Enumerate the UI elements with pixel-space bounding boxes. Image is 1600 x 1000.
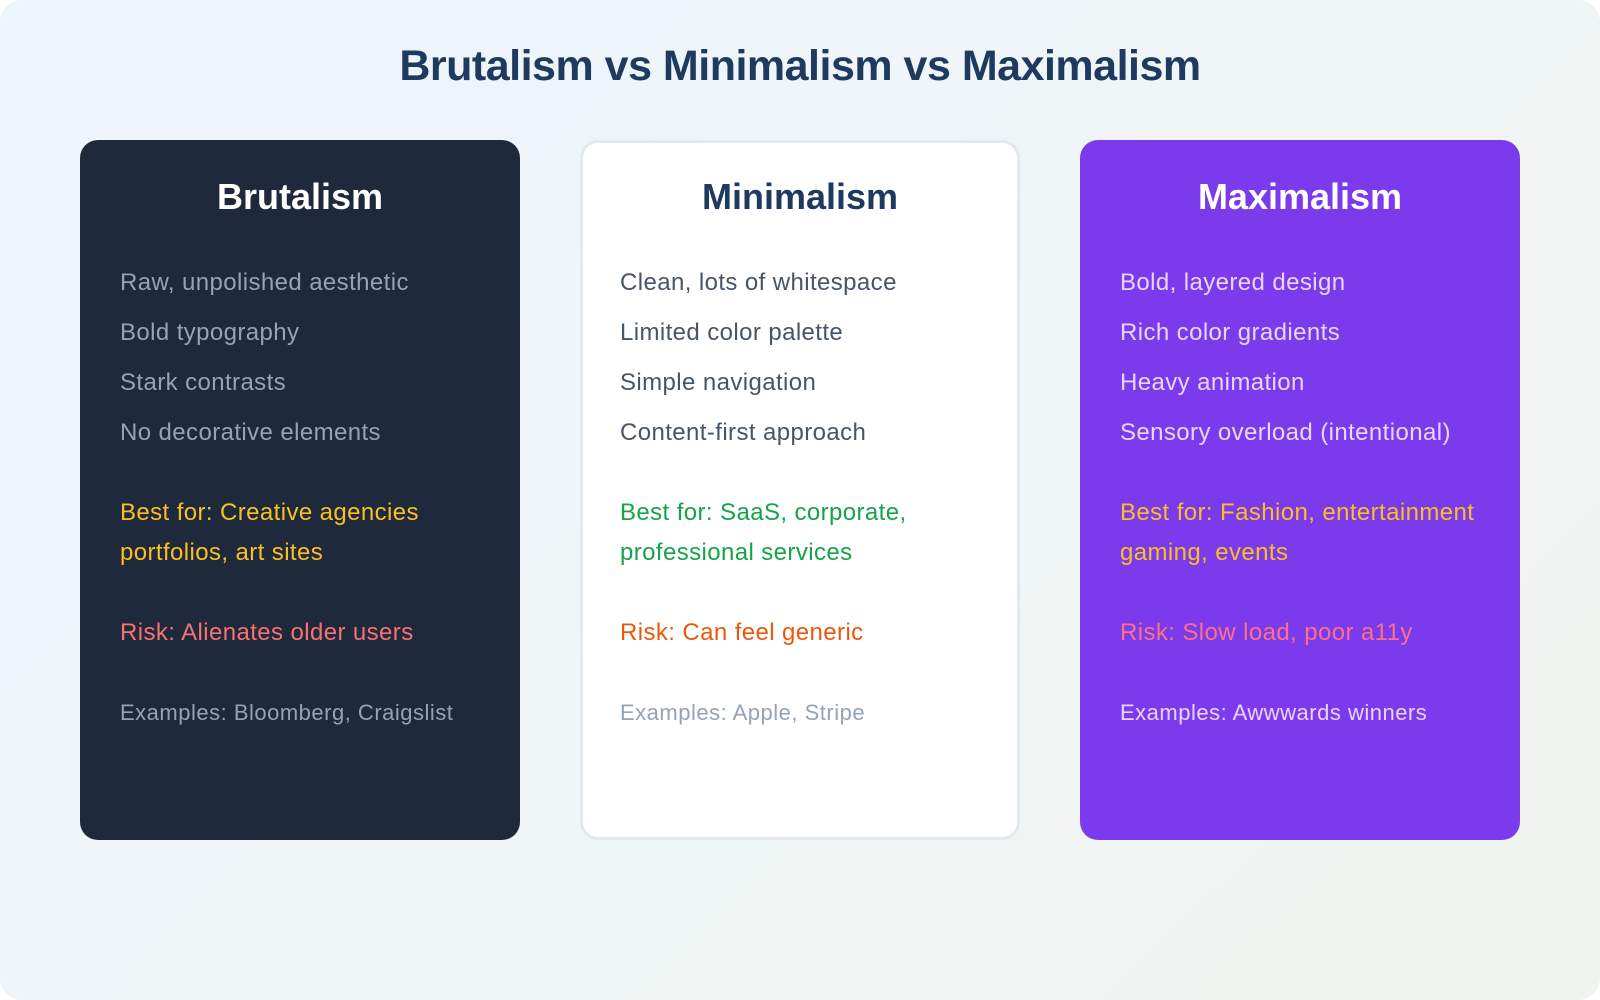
list: minimalism traits: Simple navigation xyxy=(620,369,816,396)
best for: brutalism: Best for: Creative agencies xyxy=(120,499,419,526)
heading: maximalism: Maximalism xyxy=(1198,176,1402,217)
list: maximalism traits: Rich color gradients xyxy=(1120,319,1340,346)
panel: maximalism xyxy=(1080,140,1520,840)
list: maximalism traits: Sensory overload (intentional) xyxy=(1120,419,1451,446)
heading: minimalism: Minimalism xyxy=(702,176,898,217)
best for: minimalism: Best for: SaaS, corporate, xyxy=(620,499,907,526)
risk: minimalism: Risk: Can feel generic xyxy=(620,619,864,646)
list: brutalism traits: No decorative elements xyxy=(120,419,381,446)
list: minimalism traits: Clean, lots of whitespace xyxy=(620,269,897,296)
list: maximalism traits: Heavy animation xyxy=(1120,369,1305,396)
heading: brutalism: Brutalism xyxy=(217,176,383,217)
risk: brutalism: Risk: Alienates older users xyxy=(120,619,414,646)
list: maximalism traits: Bold, layered design xyxy=(1120,269,1345,296)
list: minimalism traits: Limited color palette xyxy=(620,319,843,346)
best for: brutalism: portfolios, art sites xyxy=(120,539,323,566)
list: brutalism traits: Raw, unpolished aesthetic xyxy=(120,269,409,296)
best for: brutalism xyxy=(120,499,419,566)
panel: minimalism xyxy=(580,140,1020,840)
list: minimalism traits: Content-first approach xyxy=(620,419,866,446)
best for: minimalism xyxy=(620,499,907,566)
best for: maximalism: gaming, events xyxy=(1120,539,1288,566)
examples: brutalism: Examples: Bloomberg, Craigslist xyxy=(120,700,453,725)
list: brutalism traits: Stark contrasts xyxy=(120,369,286,396)
panel: brutalism xyxy=(80,140,520,840)
title: Brutalism vs Minimalism vs Maximalism xyxy=(399,42,1201,90)
list: brutalism traits xyxy=(120,269,409,446)
list: brutalism traits: Bold typography xyxy=(120,319,299,346)
examples: minimalism: Examples: Apple, Stripe xyxy=(620,700,865,725)
best for: maximalism xyxy=(1120,499,1474,566)
best for: minimalism: professional services xyxy=(620,539,852,566)
list: maximalism traits xyxy=(1120,269,1451,446)
risk: maximalism: Risk: Slow load, poor a11y xyxy=(1120,619,1413,646)
list: minimalism traits xyxy=(620,269,897,446)
best for: maximalism: Best for: Fashion, entertainment xyxy=(1120,499,1474,526)
examples: maximalism: Examples: Awwwards winners xyxy=(1120,700,1427,725)
